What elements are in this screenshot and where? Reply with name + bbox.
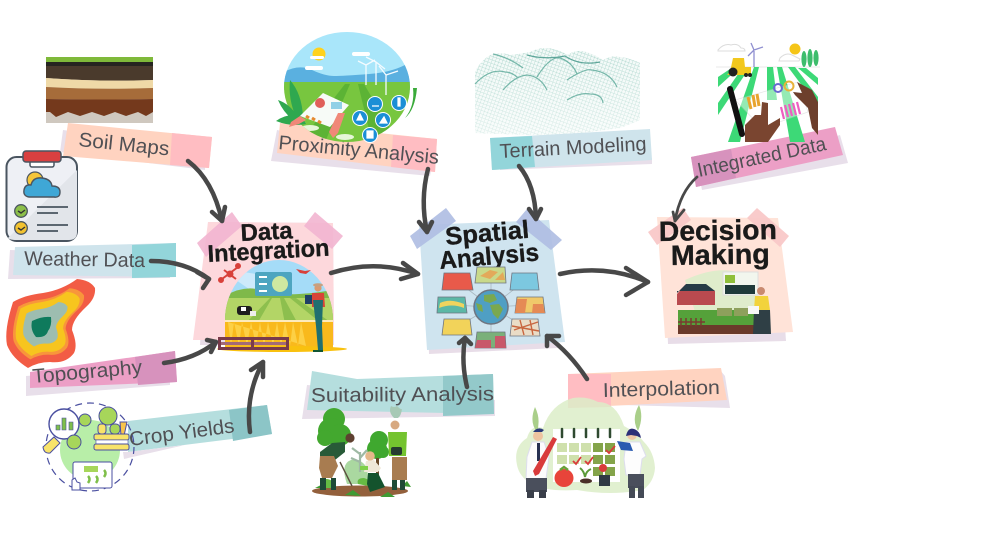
person right bbox=[390, 406, 402, 418]
label: interpolation: Interpolation bbox=[603, 377, 720, 402]
arrow: weather data to data integration bbox=[151, 261, 209, 288]
heading: spatial analysis: Spatial bbox=[444, 216, 530, 251]
label: integrated data: Integrated Data bbox=[695, 133, 829, 182]
heading: data integration bbox=[207, 217, 330, 268]
heading: spatial analysis: Analysis bbox=[438, 238, 540, 275]
arrow: topography to data integration bbox=[164, 340, 216, 363]
panel: data integration bbox=[193, 212, 347, 353]
arrow: terrain modeling to spatial analysis bbox=[519, 166, 541, 219]
label: terrain modeling: Terrain Modeling bbox=[499, 133, 647, 163]
tape: left pink bbox=[197, 212, 242, 257]
icon: soil layers bbox=[46, 57, 153, 123]
seedling middle bbox=[351, 448, 367, 472]
icon: proximity farm bbox=[276, 32, 417, 142]
label: interpolation bbox=[568, 368, 730, 408]
icon: weather clipboard bbox=[6, 151, 77, 241]
arrow: spatial analysis to decision making bbox=[560, 268, 648, 295]
heading: decision making: Decision bbox=[659, 214, 777, 247]
label: crop yields: Crop Yields bbox=[128, 415, 236, 451]
arrow: integrated data to decision making bbox=[673, 177, 697, 221]
heading: spatial analysis bbox=[438, 216, 540, 275]
heading: decision making: Making bbox=[671, 238, 770, 271]
label: terrain modeling bbox=[490, 129, 652, 170]
cow bbox=[237, 306, 256, 316]
label: proximity analysis: Proximity Analysis bbox=[278, 132, 440, 169]
icon: scientists with calendar bbox=[516, 398, 655, 498]
illustration: farmer in field bbox=[217, 258, 347, 353]
arrow: crop yields to data integration bbox=[249, 362, 263, 432]
label: topography bbox=[26, 351, 177, 396]
icon: crop yields bbox=[43, 403, 134, 491]
icon: topography contours bbox=[6, 279, 95, 368]
tape: left pink bbox=[648, 208, 691, 245]
heading: decision making bbox=[659, 214, 777, 271]
tree left bbox=[317, 408, 351, 446]
heading: data integration: Integration bbox=[207, 235, 330, 268]
fence bbox=[218, 337, 289, 350]
illustration: farmer with barn bbox=[677, 270, 771, 334]
icon: integrated data field bbox=[716, 43, 820, 142]
arrow: soil maps to data integration bbox=[188, 161, 225, 221]
panel: spatial analysis bbox=[410, 208, 565, 354]
tape: right pink bbox=[304, 212, 343, 249]
sensor icons bbox=[352, 96, 406, 142]
label: weather data bbox=[8, 243, 176, 279]
drones bbox=[219, 264, 240, 282]
person left bbox=[345, 433, 355, 443]
arrow: proximity analysis to spatial analysis bbox=[419, 169, 432, 232]
tape: right pink bbox=[747, 208, 789, 247]
arrow: interpolation to spatial analysis bbox=[547, 336, 587, 379]
icon: terrain mesh bbox=[475, 48, 640, 136]
panel: decision making bbox=[648, 208, 793, 344]
label: weather data: Weather Data bbox=[24, 248, 146, 272]
label: crop yields bbox=[123, 405, 272, 459]
arrow: suitability analysis to spatial analysis bbox=[459, 338, 471, 387]
tape: left blue bbox=[410, 208, 456, 249]
label: suitability analysis: Suitability Analysis bbox=[311, 383, 494, 407]
farmer bbox=[305, 283, 325, 352]
illustration: maps around globe bbox=[437, 267, 545, 348]
tape: right blue bbox=[516, 209, 562, 250]
label: suitability analysis bbox=[302, 371, 495, 419]
arrow: data integration to spatial analysis bbox=[331, 263, 418, 279]
person kneeling bbox=[365, 451, 375, 461]
label: topography: Topography bbox=[32, 356, 143, 388]
tree right bbox=[367, 431, 389, 459]
label: proximity analysis bbox=[271, 123, 440, 176]
label: soil maps bbox=[60, 123, 212, 170]
icon: people planting trees bbox=[312, 406, 411, 497]
heading: data integration: Data bbox=[240, 217, 294, 247]
label: soil maps: Soil Maps bbox=[77, 129, 170, 160]
